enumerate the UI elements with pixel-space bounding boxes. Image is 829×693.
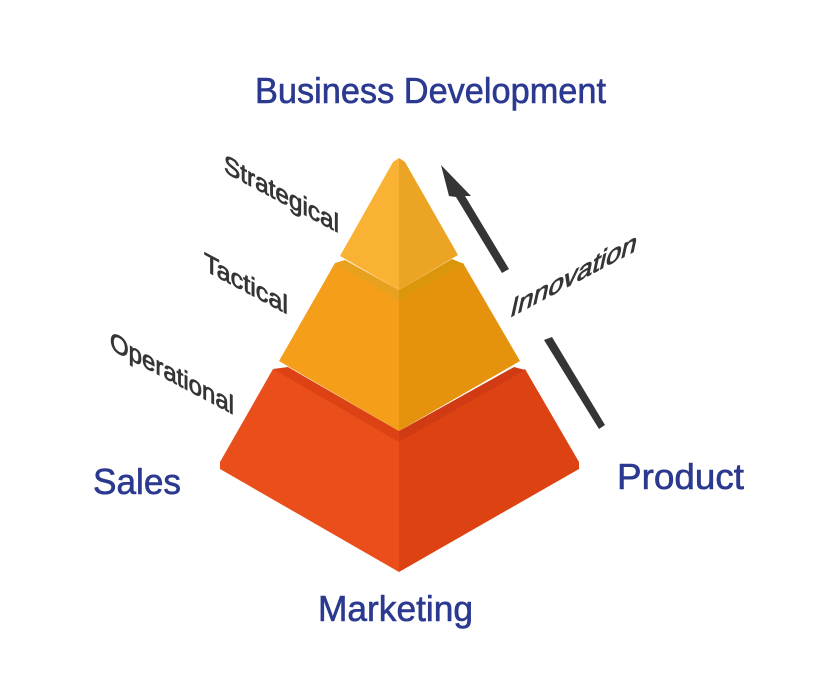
label: Tactical: Tactical xyxy=(204,247,288,320)
bottom tier: operational xyxy=(220,367,579,572)
title: Business Development: Business Development xyxy=(255,70,606,111)
label: Innovation: Innovation xyxy=(507,226,640,325)
label: Marketing: Marketing xyxy=(318,588,473,629)
top tier: strategical xyxy=(340,158,458,290)
middle tier: tactical xyxy=(279,259,520,431)
line: innovation bar xyxy=(544,337,605,429)
arrow: innovation upward xyxy=(441,165,509,273)
label: Sales: Sales xyxy=(93,461,181,502)
label: Product: Product xyxy=(617,456,744,497)
label: Strategical: Strategical xyxy=(224,149,339,239)
pyramid xyxy=(220,158,579,572)
label: Operational: Operational xyxy=(110,326,234,421)
